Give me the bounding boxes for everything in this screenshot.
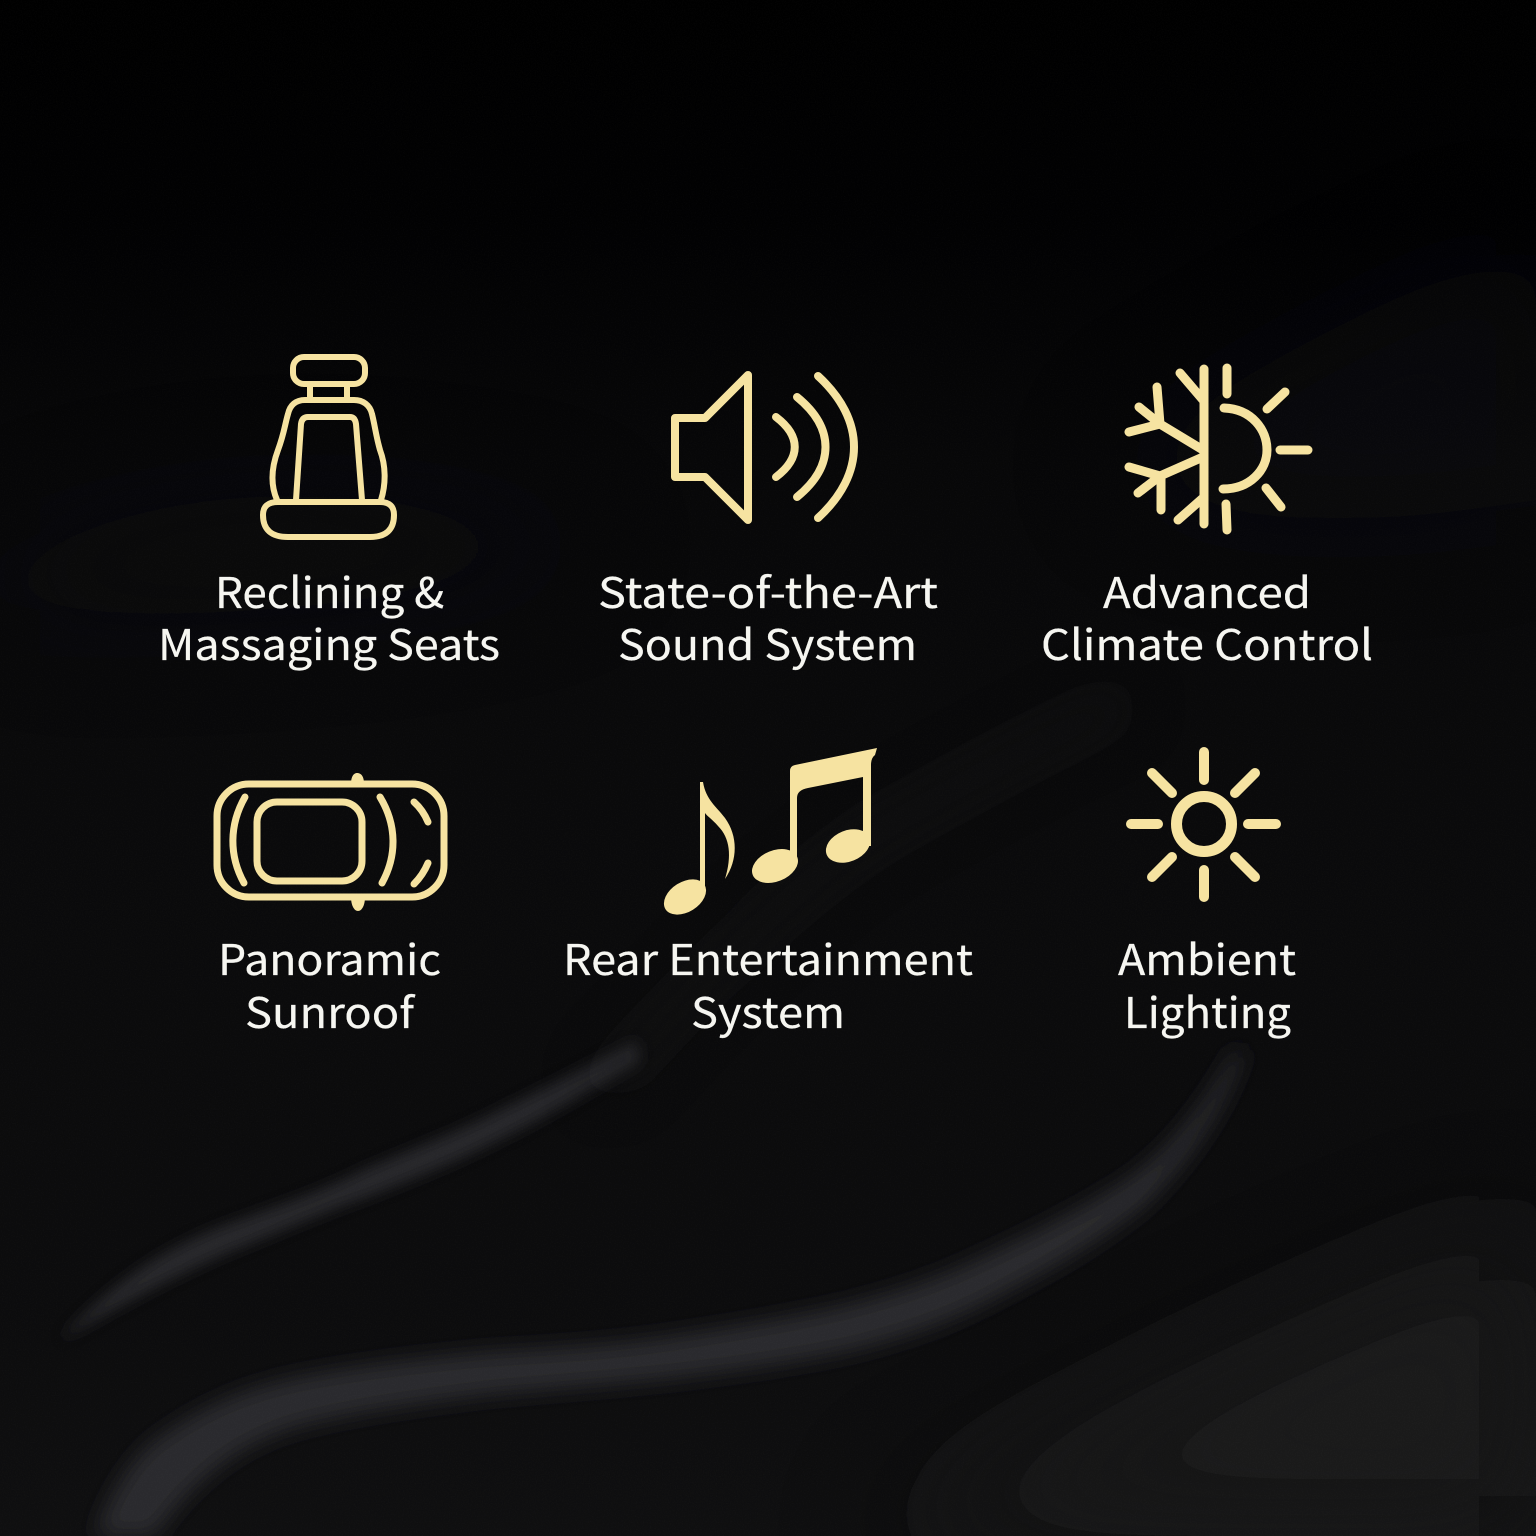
label: rear entertainment system <box>563 927 973 1041</box>
label: panoramic sunroof: Sunroof <box>245 980 415 1041</box>
label: panoramic sunroof: Panoramic <box>218 927 441 988</box>
label: ambient lighting: Ambient <box>1118 927 1296 988</box>
label: sound system <box>598 560 938 673</box>
label: sound system: Sound System <box>618 612 917 673</box>
icon: reclining seat <box>263 357 394 537</box>
label: reclining and massaging seats: Massaging Seats <box>158 612 500 673</box>
label: ambient lighting: Lighting <box>1124 980 1291 1041</box>
label: panoramic sunroof <box>218 927 441 1041</box>
icon: climate snowflake and sun <box>1129 368 1308 530</box>
icon: ambient light sun <box>1131 752 1276 897</box>
label: climate control: Climate Control <box>1041 612 1373 673</box>
label: climate control: Advanced <box>1103 560 1311 621</box>
label: rear entertainment system: Rear Entertainment <box>563 927 973 988</box>
icon: car top view with panoramic sunroof <box>217 773 444 911</box>
label: sound system: State-of-the-Art <box>598 560 938 621</box>
label: ambient lighting <box>1118 927 1296 1041</box>
label: climate control <box>1041 560 1373 673</box>
label: rear entertainment system: System <box>691 980 845 1041</box>
icon: speaker with sound waves <box>675 375 854 520</box>
label: reclining and massaging seats: Reclining & <box>215 560 444 621</box>
label: reclining and massaging seats <box>158 560 500 673</box>
icon: music notes <box>658 748 877 922</box>
